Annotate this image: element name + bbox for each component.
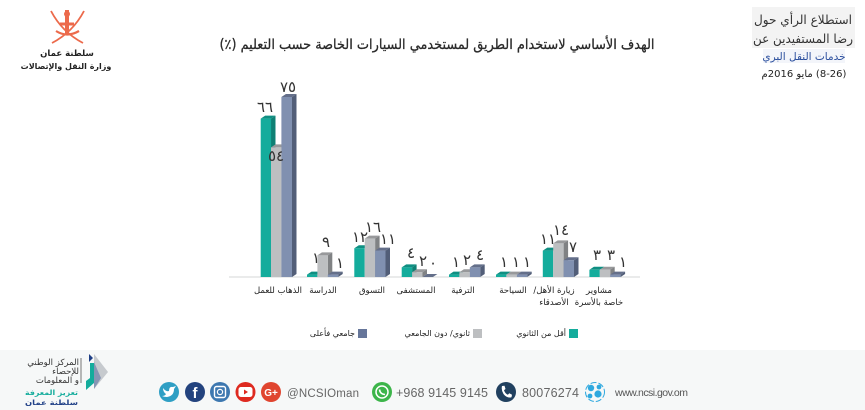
- bars: hospital: [402, 264, 437, 277]
- NCSI logo: و المعلومات: [36, 376, 79, 386]
- value labels: ٢: [463, 251, 471, 269]
- value labels: ٩: [322, 233, 330, 251]
- footer band: [0, 350, 865, 410]
- bar chart: [229, 78, 640, 308]
- survey heading box: (8-26) مايو 2016م: [762, 69, 847, 80]
- bars: family errands: [589, 267, 625, 277]
- value labels: ١: [523, 253, 531, 271]
- bars: leisure: [449, 264, 485, 277]
- value labels: [257, 78, 627, 272]
- value labels: ٦٦: [257, 98, 273, 116]
- icon: whatsapp: [372, 382, 392, 402]
- legend: جامعي فأعلى: [310, 327, 355, 338]
- survey heading box: استطلاع الرأي حول: [754, 11, 852, 28]
- category labels: الأصدقاء: [539, 297, 569, 308]
- value labels: ١: [336, 254, 344, 272]
- survey heading box: خدمات النقل البري: [762, 51, 846, 63]
- category labels: زيارة الأهل/: [533, 285, 575, 296]
- legend: [310, 327, 578, 338]
- bars: study: [307, 252, 343, 277]
- bars: work: [261, 94, 296, 277]
- value labels: ١: [512, 253, 520, 271]
- icon: Oman emblem: [51, 10, 84, 43]
- value labels: ٧٥: [280, 78, 296, 96]
- value labels: ١: [312, 249, 320, 267]
- social handle: @NCSIOman: [287, 388, 359, 400]
- value labels: ٧: [569, 238, 577, 256]
- value labels: ١١: [540, 230, 556, 248]
- value labels: ٥٤: [268, 147, 284, 165]
- value labels: ١٢: [352, 228, 368, 246]
- value labels: ٣: [593, 246, 601, 264]
- value labels: ٢: [419, 252, 427, 270]
- icon: google plus: G+: [264, 388, 278, 399]
- NCSI logo: سلطنة عمان: [25, 399, 78, 407]
- icon: twitter: [159, 382, 179, 402]
- NCSI logo: المركز الوطني: [27, 358, 79, 368]
- chart title: الهدف الأساسي لاستخدام الطريق لمستخدمي السيارات الخاصة حسب التعليم (٪): [220, 35, 654, 53]
- category labels: [254, 285, 623, 308]
- bars: shopping: [354, 236, 390, 277]
- value labels: ٠: [429, 254, 437, 272]
- category labels: الذهاب للعمل: [254, 286, 302, 296]
- phone number: 80076274: [522, 386, 579, 400]
- icon: facebook: f: [192, 385, 198, 402]
- category labels: السياحة: [499, 286, 527, 296]
- bars: tourism: [496, 272, 532, 277]
- bars: visiting: [543, 240, 578, 277]
- category labels: المستشفى: [397, 286, 435, 296]
- value labels: ١٤: [553, 221, 569, 239]
- survey heading box: رضا المستفيدين عن: [753, 31, 853, 47]
- value labels: ٤: [407, 244, 415, 262]
- category labels: التسوق: [359, 286, 385, 296]
- ministry logo: وزارة النقل والإتصالات: [21, 62, 111, 71]
- icon: google plus: [261, 382, 281, 402]
- NCSI logo: [25, 354, 108, 407]
- legend: ثانوي/ دون الجامعي: [405, 329, 470, 338]
- icon: instagram: [210, 382, 230, 402]
- icon: facebook: [185, 382, 205, 402]
- value labels: ١١: [380, 230, 396, 248]
- value labels: ١: [619, 253, 627, 271]
- whatsapp number: +968 9145 9145: [396, 386, 488, 400]
- category labels: خاصة بالأسرة: [575, 297, 623, 308]
- value labels: ١: [452, 253, 460, 271]
- icon: phone: [496, 382, 516, 402]
- NCSI logo: للإحصاء: [52, 367, 79, 377]
- category labels: الدراسة: [309, 286, 337, 296]
- icon: youtube: [236, 382, 256, 402]
- ministry logo: سلطنة عمان: [40, 49, 94, 59]
- category labels: مشاوير: [585, 286, 612, 296]
- NCSI logo: تعزيز المعرفة: [25, 389, 78, 397]
- ministry logo: [21, 10, 111, 71]
- value labels: ١: [500, 253, 508, 271]
- website: www.ncsi.gov.om: [614, 387, 688, 399]
- category labels: الترفية: [451, 286, 475, 296]
- value labels: ٤: [476, 246, 484, 264]
- icon: globe: [586, 382, 604, 402]
- survey heading box: [752, 7, 855, 80]
- value labels: ٣: [607, 246, 615, 264]
- legend: أقل من الثانوي: [516, 328, 566, 338]
- value labels: ١٦: [365, 218, 381, 236]
